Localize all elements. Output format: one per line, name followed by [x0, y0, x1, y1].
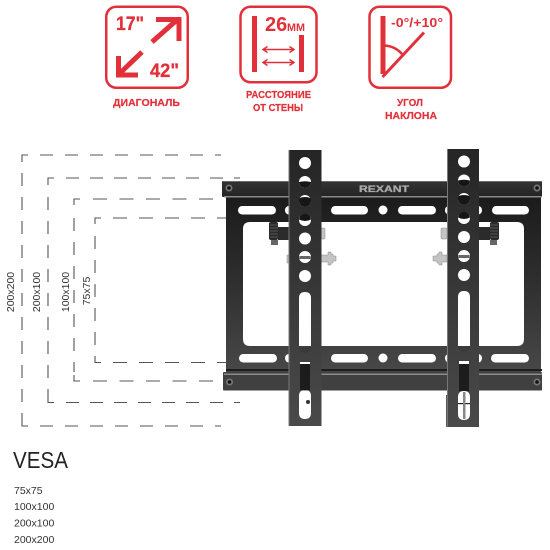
text: mm unit: ММ: [287, 22, 305, 34]
label: wall distance line 2: ОТ СТЕНЫ: [253, 103, 303, 114]
label: tilt line 1: УГОЛ: [397, 98, 423, 109]
arrow: up right: [152, 19, 179, 42]
icon: tilt angle: [370, 7, 451, 88]
tilt lines: [382, 16, 424, 77]
frame slots: [238, 206, 529, 362]
knob: right: [478, 222, 499, 245]
list: VESA sizes: 200x100: [14, 518, 54, 530]
wall bars: [252, 16, 304, 72]
hole shading: left: [299, 181, 311, 259]
dashed outline: 75x75: [95, 218, 226, 362]
list: VESA sizes: 75x75: [14, 485, 43, 497]
text: tilt range: -0°/+10°: [391, 16, 443, 30]
icon: diagonal: [106, 7, 188, 88]
text: 42 inch: 42": [150, 61, 179, 82]
dimension labels: 100x100: [60, 272, 72, 312]
bolts: [287, 228, 447, 265]
frame plate: [226, 196, 541, 372]
dashed outline: 200x100: [48, 178, 240, 402]
dimension labels: [5, 272, 93, 312]
label: wall distance line 1: РАССТОЯНИЕ: [246, 90, 311, 101]
bottom rail: [223, 369, 542, 390]
strip: left: [288, 150, 322, 426]
heading: VESA: VESA: [13, 447, 69, 473]
list: VESA sizes: [14, 485, 54, 546]
dashed outline: 100x100: [74, 199, 222, 381]
icon: wall distance: [240, 7, 316, 82]
knob: left: [269, 222, 290, 245]
text: 26 mm: 26: [265, 14, 287, 36]
arrow: down left: [118, 52, 142, 75]
hole shading: right: [458, 180, 470, 258]
brand text: REXANT: [359, 184, 409, 195]
strip: right: [446, 149, 479, 427]
top rail: [222, 181, 542, 198]
label: diagonal: ДИАГОНАЛЬ: [113, 98, 180, 109]
arrows: distance: [263, 46, 294, 66]
dashed outline: 200x200: [22, 155, 221, 426]
label: tilt line 2: НАКЛОНА: [385, 111, 437, 122]
dimension labels: 75x75: [81, 277, 93, 305]
text: 17 inch: 17": [116, 14, 144, 35]
dimension labels: 200x200: [5, 272, 17, 312]
dimension labels: 200x100: [31, 272, 43, 312]
list: VESA sizes: 100x100: [14, 501, 54, 513]
list: VESA sizes: 200x200: [14, 534, 54, 546]
mount bracket: [222, 149, 542, 427]
